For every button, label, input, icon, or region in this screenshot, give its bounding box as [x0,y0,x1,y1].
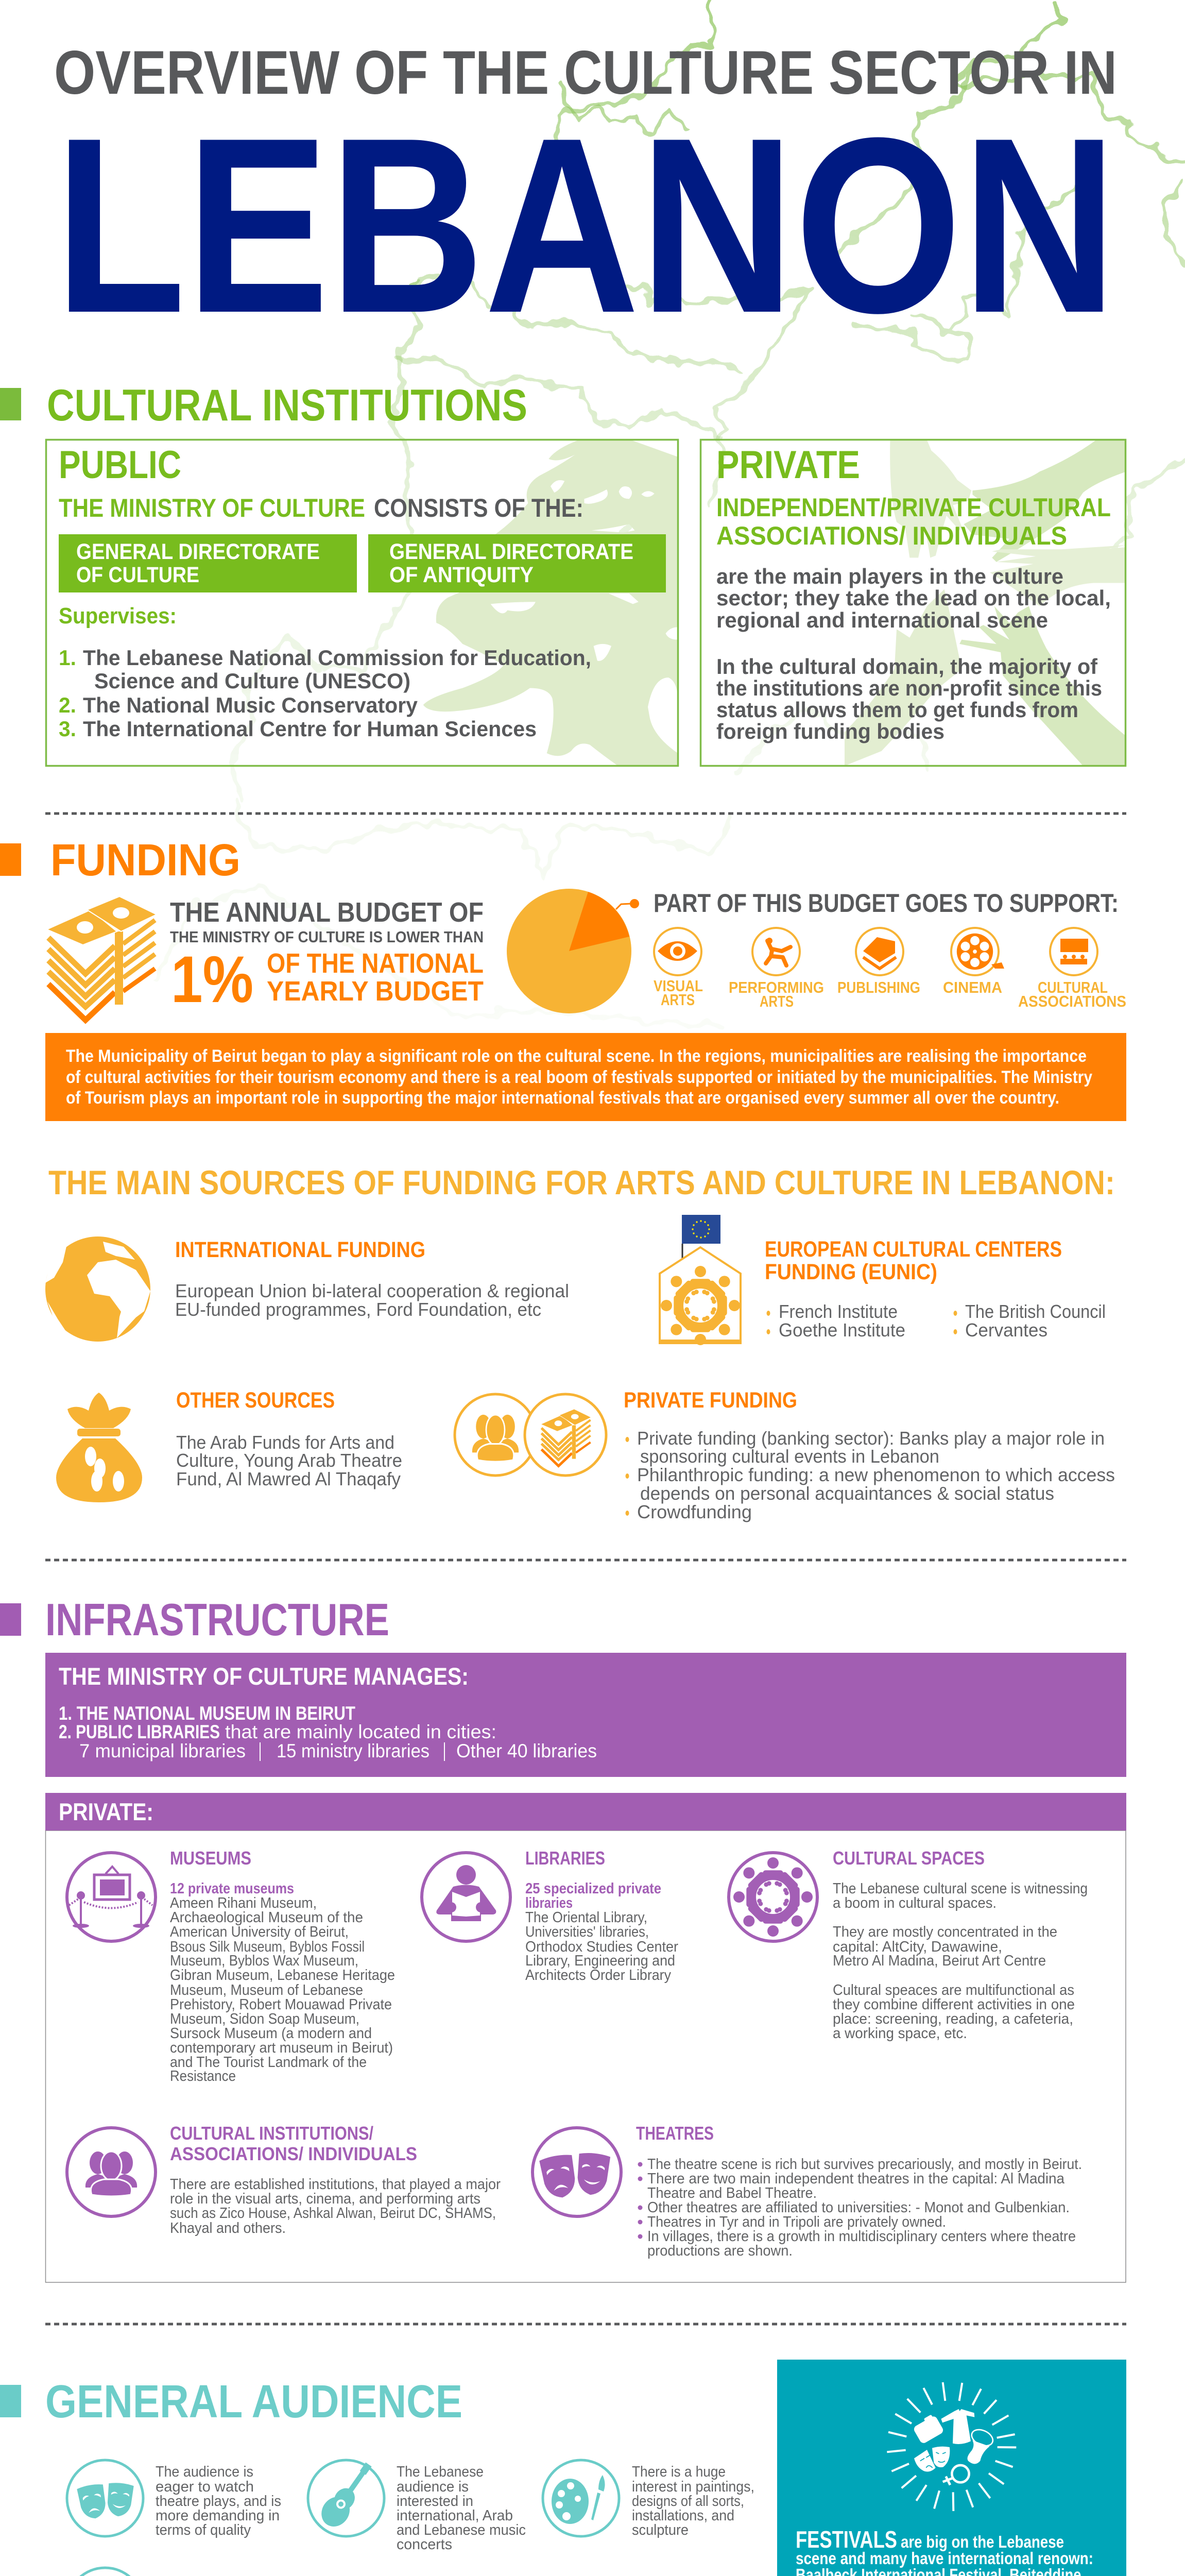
institutions text: such as Zico House, Ashkal Alwan, Beirut DC, SHAMS, [170,2205,496,2222]
ministry of culture line: CONSISTS OF THE: [374,494,583,522]
panel: festivals [777,2360,1126,2576]
budget statement: THE MINISTRY OF CULTURE IS LOWER THAN [170,928,484,946]
cultural spaces text: Cultural speaces are multifunctional as [833,1982,1074,1998]
box: directorate of antiquity [368,534,666,592]
museums text: Archaeological Museum of the [170,1909,363,1926]
museums text: Museum, Byblos Wax Museum, [170,1953,358,1969]
panel: ministry of culture manages: 15 ministry libraries [277,1740,430,1761]
institutions text: role in the visual arts, cinema, and performing arts [170,2191,480,2207]
eunic text [765,1237,1106,1341]
private funding text: Crowdfunding [637,1501,752,1522]
libraries text: Universities' libraries, [525,1924,649,1940]
audience text: painting: interest in paintings, [632,2479,754,2495]
label: publishing: PUBLISHING [837,978,920,996]
icon: film reel [67,2568,153,2576]
private banner: PRIVATE: [59,1798,153,1825]
museums text: American University of Beirut, [170,1924,349,1940]
museums text: Gibran Museum, Lebanese Heritage [170,1967,395,1984]
icon: festival sunburst [887,2382,1016,2511]
section heading: general audience: GENERAL AUDIENCE [45,2376,462,2428]
callout: municipalities: The Municipality of Beirut began to play a significant role on the cultural scene. In the regions, municipalities are realising the importance [66,1046,1087,1066]
theatres text: THEATRES [636,2123,714,2144]
label: cultural associations: ASSOCIATIONS [1018,992,1126,1010]
eunic text: FUNDING (EUNIC) [765,1260,937,1284]
box: directorate of antiquity: GENERAL DIRECTORATE [389,539,633,564]
label: visual arts [654,977,703,1009]
pie chart [507,889,639,1013]
section heading: infrastructure: INFRASTRUCTURE [45,1594,389,1645]
institutions text: ASSOCIATIONS/ INDIVIDUALS [170,2143,417,2164]
private subheading [716,493,1111,550]
tree and hands artwork inside panels [423,440,1126,766]
cultural spaces text: capital: AltCity, Dawawine, [833,1939,1002,1955]
private body text [716,564,1111,743]
supervised bodies list: 3. [59,717,76,741]
audience text: music: interested in [397,2493,473,2510]
libraries text: Orthodox Studies Center [525,1939,678,1955]
private body text: are the main players in the culture [716,564,1063,588]
panel: ministry of culture manages: that are mainly located in cities: [225,1721,496,1742]
other sources text: Fund, Al Mawred Al Thaqafy [176,1468,401,1489]
private funding text: Philanthropic funding: a new phenomenon to which access [637,1464,1115,1485]
panel: ministry of culture manages: THE MINISTRY OF CULTURE MANAGES: [59,1663,469,1690]
panel: ministry of culture manages: 2. PUBLIC LIBRARIES [59,1721,220,1742]
museums text: Museum, Museum of Lebanese [170,1982,363,1998]
icon: globe [45,1236,150,1342]
museums text: and The Tourist Landmark of the [170,2054,367,2071]
supervised bodies list: The International Centre for Human Sciences [83,717,537,741]
other sources text: The Arab Funds for Arts and [176,1432,394,1453]
theatres text: There are two main independent theatres in the capital: Al Madina [647,2171,1065,2187]
international funding text: INTERNATIONAL FUNDING [175,1238,425,1262]
cultural spaces text: CULTURAL SPACES [833,1848,985,1869]
section heading: cultural institutions: CULTURAL INSTITUTIONS [47,381,527,430]
theatres text: In villages, there is a growth in multidisciplinary centers where theatre [647,2228,1076,2245]
icon: publishing [856,928,903,975]
libraries text: LIBRARIES [525,1848,605,1869]
background map of Lebanon [154,0,1185,1025]
icon: cultural spaces [729,1853,817,1941]
section heading: funding: FUNDING [50,835,241,885]
callout: municipalities [45,1033,1126,1121]
audience text: painting: There is a huge [632,2464,726,2480]
eunic text: Goethe Institute [779,1319,905,1341]
panel: ministry of culture manages: 1. THE NATIONAL MUSEUM IN BEIRUT [59,1703,355,1724]
label: visual arts: ARTS [661,991,695,1009]
museums text: Bsous Silk Museum, Byblos Fossil [170,1939,365,1955]
theatres text [636,2123,1082,2259]
eunic text: The British Council [965,1301,1106,1322]
international funding text [175,1238,569,1320]
budget statement: OF THE NATIONAL [267,948,484,979]
icon: guitar [308,2457,384,2536]
institutions text [170,2123,501,2236]
international funding text: EU-funded programmes, Ford Foundation, etc [175,1299,541,1320]
box: directorate of culture [59,534,357,592]
audience text: theatre: more demanding in [156,2507,280,2524]
audience text: music [397,2464,526,2553]
theatres text: Theatre and Babel Theatre. [647,2185,817,2201]
festivals text: are big on the Lebanese [901,2532,1064,2551]
budget statement: 1% [171,943,253,1016]
panel: ministry of culture manages: Other 40 libraries [456,1740,597,1761]
icon: EU flag and house [659,1215,741,1345]
theatres text: The theatre scene is rich but survives precariously, and mostly in Beirut. [647,2156,1082,2173]
cultural spaces text: they combine different activities in one [833,1996,1075,2013]
ministry of culture line [59,494,583,522]
icon: libraries [422,1853,510,1941]
private body text: status allows them to get funds from [716,698,1078,722]
label: performing arts [729,978,824,1010]
private funding text: Private funding (banking sector): Banks play a major role in [637,1428,1105,1449]
private body text: foreign funding bodies [716,719,944,743]
audience text: theatre: eager to watch [156,2479,254,2495]
icon: private funding circles [455,1394,606,1476]
label: cultural associations: CULTURAL [1038,978,1108,996]
audience text: theatre: The audience is [156,2464,253,2480]
public heading: PUBLIC [59,443,181,487]
icon: stack of money [47,896,157,1020]
supervised bodies list: The National Music Conservatory [83,693,418,717]
museums text: Resistance [170,2068,236,2084]
panel: private [700,440,1126,766]
festivals text: FESTIVALS [796,2526,897,2553]
audience text: painting [632,2464,754,2538]
label: cultural associations [1018,978,1126,1010]
theatres text: Theatres in Tyr and in Tripoli are privately owned. [647,2214,946,2230]
icon: theatres masks [533,2128,621,2216]
museums text: Prehistory, Robert Mouawad Private [170,1996,392,2013]
cultural spaces text: a working space, etc. [833,2025,967,2042]
label: performing arts: PERFORMING [729,978,824,996]
cultural spaces text [833,1848,1088,2042]
other sources text [176,1388,402,1489]
label: visual arts: VISUAL [654,977,703,995]
private funding text: depends on personal acquaintances & social status [640,1483,1054,1504]
private subheading: ASSOCIATIONS/ INDIVIDUALS [716,521,1067,550]
ministry of culture line: THE MINISTRY OF CULTURE [59,494,365,522]
private funding text: PRIVATE FUNDING [624,1388,797,1413]
supervised bodies list [59,646,591,741]
libraries text: 25 specialized private [525,1880,661,1897]
icon: institutions people [67,2128,156,2216]
eunic text: French Institute [779,1301,898,1322]
audience text: theatre: theatre plays, and is [156,2493,281,2510]
icon: money bag [56,1393,142,1502]
museums text: contemporary art museum in Beirut) [170,2040,393,2056]
private body text: the institutions are non-profit since this [716,676,1102,700]
audience text: music: international, Arab [397,2507,513,2524]
eunic text: Cervantes [965,1319,1047,1341]
eunic text: EUROPEAN CULTURAL CENTERS [765,1237,1062,1262]
box: directorate of culture: GENERAL DIRECTORATE [76,539,320,564]
museums text: Sursock Museum (a modern and [170,2025,372,2042]
audience text: theatre: terms of quality [156,2522,251,2538]
museums text: Museum, Sidon Soap Museum, [170,2011,359,2027]
private body text: sector; they take the lead on the local, [716,586,1111,610]
label: performing arts: ARTS [760,992,794,1010]
festivals text: scene and many have international renown: [796,2549,1093,2568]
budget statement: THE ANNUAL BUDGET OF [170,897,484,928]
private body text: regional and international scene [716,608,1048,632]
audience text: music: and Lebanese music [397,2522,526,2538]
audience text: painting: designs of all sorts, [632,2493,744,2510]
museums text: 12 private museums [170,1880,294,1897]
box: directorate of antiquity: OF ANTIQUITY [389,563,534,587]
panel: ministry of culture manages: 7 municipal libraries [79,1740,246,1761]
supervises label: Supervises: [59,603,177,629]
institutions text: CULTURAL INSTITUTIONS/ [170,2123,373,2144]
theatres text: productions are shown. [647,2243,793,2259]
other sources text: OTHER SOURCES [176,1388,335,1413]
audience text: painting: installations, and [632,2507,734,2524]
supervised bodies list: 1. [59,646,76,670]
audience text: music: The Lebanese [397,2464,484,2480]
libraries text: libraries [525,1895,573,1911]
museums text: Ameen Rihani Museum, [170,1895,317,1911]
libraries text: Architects Order Library [525,1967,671,1984]
cultural spaces text: a boom in cultural spaces. [833,1895,997,1911]
other sources text: Culture, Young Arab Theatre [176,1450,402,1471]
supervised bodies list: The Lebanese National Commission for Education, [83,646,591,670]
private funding text: sponsoring cultural events in Lebanon [640,1446,939,1467]
festivals text [796,2526,1093,2576]
icon: museums [67,1853,156,1941]
audience text: music: audience is [397,2479,469,2495]
panel: public [46,440,678,766]
private heading: PRIVATE [716,443,860,487]
panel: private infrastructure [45,1793,1126,2282]
institutions text: Khayal and others. [170,2220,286,2236]
private funding text [624,1388,1115,1522]
icon: palette [543,2460,619,2536]
supervised bodies list: Science and Culture (UNESCO) [94,669,410,693]
theatres text: Other theatres are affiliated to universities: - Monot and Gulbenkian. [647,2199,1070,2216]
icon: visual arts [654,928,701,975]
cultural spaces text: The Lebanese cultural scene is witnessing [833,1880,1088,1897]
icon: cultural associations [1050,928,1097,975]
cultural spaces text: place: screening, reading, a cafeteria, [833,2011,1073,2027]
museums text: MUSEUMS [170,1848,251,1869]
icon: theatre masks teal [67,2460,143,2536]
private banner [45,1793,1126,1831]
label: cinema: CINEMA [943,978,1002,996]
budget statement [170,897,484,1016]
institutions text: There are established institutions, that played a major [170,2176,501,2193]
box: directorate of culture: OF CULTURE [76,563,199,587]
private body text: In the cultural domain, the majority of [716,654,1098,679]
museums text [170,1848,395,2084]
audience text: painting: sculpture [632,2522,689,2538]
icon: performing arts [752,928,800,975]
libraries text: Library, Engineering and [525,1953,675,1969]
audience text: music: concerts [397,2536,452,2553]
libraries text [525,1848,678,1984]
panel: ministry of culture manages [45,1653,1126,1777]
icon: cinema [951,928,1004,975]
cultural spaces text: They are mostly concentrated in the [833,1924,1057,1940]
audience text: theatre [156,2464,281,2538]
international funding text: European Union bi-lateral cooperation & regional [175,1280,569,1301]
private subheading: INDEPENDENT/PRIVATE CULTURAL [716,493,1111,522]
budget statement: YEARLY BUDGET [267,976,484,1007]
cultural spaces text: Metro Al Madina, Beirut Art Centre [833,1953,1046,1969]
supervised bodies list: 2. [59,693,76,717]
callout: municipalities: of Tourism plays an important role in supporting the major international festivals that are organised every summer all over the country. [66,1088,1059,1108]
libraries text: The Oriental Library, [525,1909,647,1926]
